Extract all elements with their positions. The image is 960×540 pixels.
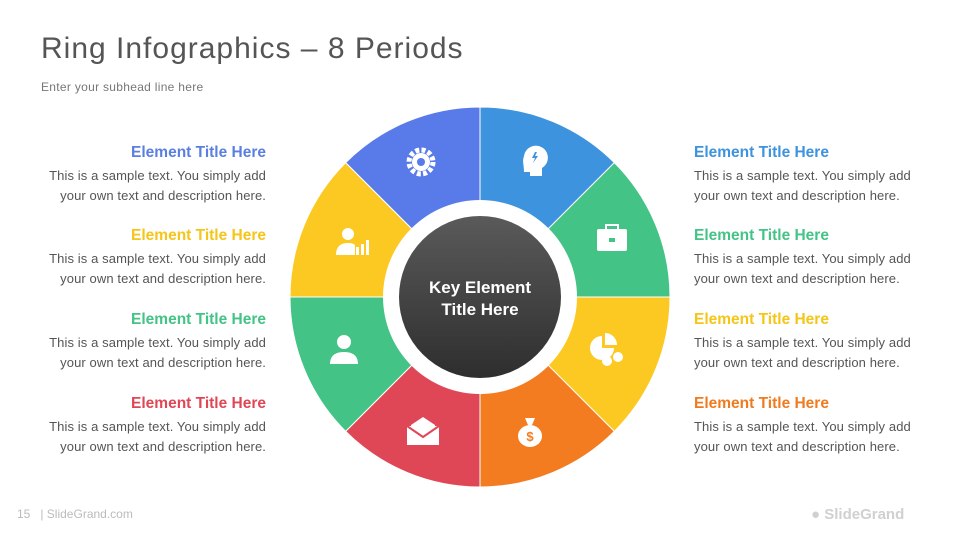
left block 1: Element Title Here (131, 144, 266, 161)
subhead: Enter your subhead line here (41, 80, 204, 94)
left block 3: your own text and description here. (60, 355, 266, 370)
icon: person (330, 335, 358, 364)
center circle: Key Element (429, 278, 531, 297)
left block 4: your own text and description here. (60, 439, 266, 454)
right block 4: your own text and description here. (694, 439, 900, 454)
icon: gear (409, 150, 433, 174)
icon: person growth (336, 228, 369, 255)
icon: head (523, 146, 548, 176)
icon: envelope (407, 417, 439, 445)
right block 2: your own text and description here. (694, 271, 900, 286)
left block 4: Element Title Here (131, 395, 266, 412)
right block 2: Element Title Here (694, 227, 829, 244)
left block 4 (49, 395, 266, 454)
right block 1: This is a sample text. You simply add (694, 168, 911, 183)
right block 1: Element Title Here (694, 144, 829, 161)
right block 1: your own text and description here. (694, 188, 900, 203)
right block 3: your own text and description here. (694, 355, 900, 370)
left block 2: your own text and description here. (60, 271, 266, 286)
left block 3: Element Title Here (131, 311, 266, 328)
right block 2: This is a sample text. You simply add (694, 251, 911, 266)
footer logo: ● SlideGrand (811, 506, 904, 523)
right block 4 (694, 395, 911, 454)
left block 1: your own text and description here. (60, 188, 266, 203)
left block 4: This is a sample text. You simply add (49, 419, 266, 434)
icon: briefcase (597, 225, 627, 251)
icon: money bag: $ (526, 429, 534, 444)
left block 3: This is a sample text. You simply add (49, 335, 266, 350)
left block 2: This is a sample text. You simply add (49, 251, 266, 266)
icon: money bag (518, 418, 542, 447)
right block 4: This is a sample text. You simply add (694, 419, 911, 434)
footer page number: 15 | SlideGrand.com (17, 507, 133, 521)
right block 2 (694, 227, 911, 286)
right block 1 (694, 144, 911, 203)
right block 3: Element Title Here (694, 311, 829, 328)
title: Ring Infographics – 8 Periods (41, 32, 464, 65)
left block 1: This is a sample text. You simply add (49, 168, 266, 183)
left block 2 (49, 227, 266, 286)
right block 4: Element Title Here (694, 395, 829, 412)
right block 3: This is a sample text. You simply add (694, 335, 911, 350)
left block 1 (49, 144, 266, 203)
center circle: Title Here (441, 300, 519, 319)
left block 2: Element Title Here (131, 227, 266, 244)
center circle (399, 216, 561, 378)
left block 3 (49, 311, 266, 370)
right block 3 (694, 311, 911, 370)
icon: pie gears (590, 333, 623, 366)
